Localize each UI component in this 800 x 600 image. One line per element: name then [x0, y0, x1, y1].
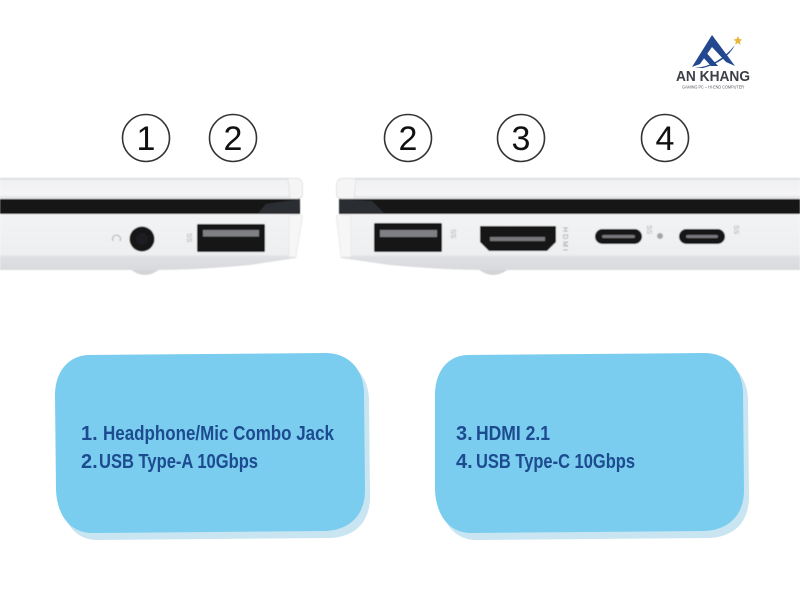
HDMI label: HDMI: [561, 227, 568, 251]
HDMI port: [480, 226, 556, 251]
number badge 2 right: [384, 114, 432, 162]
status LED: [657, 233, 663, 239]
list text right: 3.: [456, 423, 473, 445]
logo: An Khang: [676, 35, 750, 90]
list text left: Headphone/Mic Combo Jack: [103, 423, 335, 445]
laptop left side view: [0, 178, 303, 275]
list text right: [456, 423, 635, 473]
base right: [336, 214, 800, 270]
panel shadow right: [440, 360, 749, 540]
USB label right: SS: [449, 229, 456, 239]
logo: An Khang: GAMING PC – HI-END COMPUTER: [682, 84, 745, 90]
base left: [0, 214, 303, 270]
USB label left: SS: [185, 233, 192, 243]
list text left: 2.: [81, 451, 98, 473]
number badge 2 left: [210, 114, 256, 162]
lid left: [0, 178, 303, 199]
hinge gap right: [339, 198, 800, 214]
lid right: [336, 178, 800, 199]
panel body left: [55, 353, 365, 533]
number badge 4: [642, 114, 688, 162]
number badge 4: 4: [656, 120, 674, 158]
panel body right: [435, 353, 744, 533]
panel: right port list: [435, 353, 749, 540]
USB-C port 1: [595, 229, 642, 244]
rubber foot right: [477, 268, 510, 275]
list text right: USB Type-C 10Gbps: [476, 451, 635, 473]
audio jack: [130, 226, 154, 252]
number badge 1: 1: [137, 120, 155, 158]
rubber foot left: [129, 268, 161, 275]
logo: An Khang: AN KHANG: [676, 69, 750, 85]
USB-C label 2: SS: [732, 225, 739, 235]
USB-C port 2: [679, 229, 725, 244]
panel shadow left: [60, 360, 370, 540]
number badge 2 left: 2: [224, 120, 242, 158]
USB-A port right: [374, 223, 442, 252]
list text right: 4.: [456, 451, 473, 473]
list text right: HDMI 2.1: [476, 423, 550, 445]
number badge 1: [122, 114, 170, 162]
number badge 3: [498, 114, 544, 162]
laptop right side view: [336, 178, 800, 275]
USB-A port left: [197, 224, 265, 252]
panel: left port list: [55, 353, 370, 540]
list text left: 1.: [81, 423, 98, 445]
USB-C label 1: SS: [645, 225, 652, 235]
number badge 3: 3: [512, 120, 530, 158]
hinge gap left: [0, 198, 300, 214]
list text left: USB Type-A 10Gbps: [99, 451, 258, 473]
number badge 2 right: 2: [399, 120, 417, 158]
list text left: [81, 423, 335, 473]
headphone icon: [112, 235, 120, 241]
